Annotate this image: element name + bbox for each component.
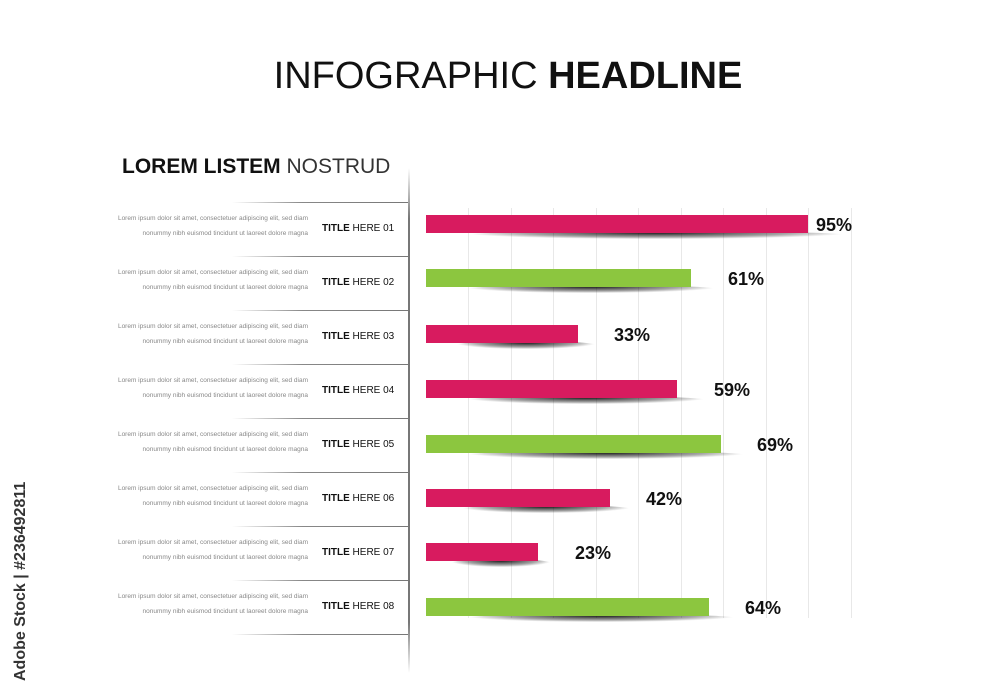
row 07: Lorem ipsum dolor sit amet, consectetuer adipiscing elit, sed diam xyxy=(118,539,308,546)
bar 03: 33% xyxy=(614,325,650,345)
row 01: TITLE HERE 01 xyxy=(322,223,394,234)
row 08: nonummy nibh euismod tincidunt ut laoreet dolore magna xyxy=(142,608,308,615)
row 01 xyxy=(118,215,394,237)
row 06: TITLE HERE 06 xyxy=(322,493,394,504)
row 08: Lorem ipsum dolor sit amet, consectetuer adipiscing elit, sed diam xyxy=(118,593,308,600)
row 03: nonummy nibh euismod tincidunt ut laoreet dolore magna xyxy=(142,338,308,345)
bar 08 xyxy=(426,598,781,622)
row 03 xyxy=(118,323,394,345)
bar 08: 64% xyxy=(745,598,781,618)
bar 04: 59% xyxy=(714,380,750,400)
bar 07: 23% xyxy=(575,543,611,563)
bar 01: 95% xyxy=(816,215,852,235)
row 03: TITLE HERE 03 xyxy=(322,331,394,342)
row 01: nonummy nibh euismod tincidunt ut laoreet dolore magna xyxy=(142,230,308,237)
bar 06 xyxy=(426,489,682,513)
row 06 xyxy=(118,485,394,507)
row 04: nonummy nibh euismod tincidunt ut laoreet dolore magna xyxy=(142,392,308,399)
bar 03 xyxy=(426,325,650,349)
row 07 xyxy=(118,539,394,561)
bar 02: 61% xyxy=(728,269,764,289)
row 08: TITLE HERE 08 xyxy=(322,601,394,612)
vertical divider xyxy=(408,168,410,673)
row 04 xyxy=(118,377,394,399)
subtitle: LOREM LISTEM NOSTRUD xyxy=(122,155,390,178)
row 05: Lorem ipsum dolor sit amet, consectetuer adipiscing elit, sed diam xyxy=(118,431,308,438)
row 03: Lorem ipsum dolor sit amet, consectetuer adipiscing elit, sed diam xyxy=(118,323,308,330)
bar 05: 69% xyxy=(757,435,793,455)
bar 04 xyxy=(426,380,750,404)
row 05: TITLE HERE 05 xyxy=(322,439,394,450)
row 02: Lorem ipsum dolor sit amet, consectetuer adipiscing elit, sed diam xyxy=(118,269,308,276)
bar 07 xyxy=(426,543,611,567)
row 07: nonummy nibh euismod tincidunt ut laoreet dolore magna xyxy=(142,554,308,561)
row 01: Lorem ipsum dolor sit amet, consectetuer adipiscing elit, sed diam xyxy=(118,215,308,222)
row 04: Lorem ipsum dolor sit amet, consectetuer adipiscing elit, sed diam xyxy=(118,377,308,384)
row 02: nonummy nibh euismod tincidunt ut laoreet dolore magna xyxy=(142,284,308,291)
row 07: TITLE HERE 07 xyxy=(322,547,394,558)
row 02 xyxy=(118,269,394,291)
row 05: nonummy nibh euismod tincidunt ut laoreet dolore magna xyxy=(142,446,308,453)
bar 01 xyxy=(426,215,852,239)
row 05 xyxy=(118,431,394,453)
watermark id: Adobe Stock | #236492811 xyxy=(12,482,29,681)
row 06: Lorem ipsum dolor sit amet, consectetuer adipiscing elit, sed diam xyxy=(118,485,308,492)
row 08 xyxy=(118,593,394,615)
row 06: nonummy nibh euismod tincidunt ut laoreet dolore magna xyxy=(142,500,308,507)
row 02: TITLE HERE 02 xyxy=(322,277,394,288)
bar 06: 42% xyxy=(646,489,682,509)
row 04: TITLE HERE 04 xyxy=(322,385,394,396)
bar 02 xyxy=(426,269,764,293)
title: INFOGRAPHIC HEADLINE xyxy=(274,55,742,97)
bar 05 xyxy=(426,435,793,459)
